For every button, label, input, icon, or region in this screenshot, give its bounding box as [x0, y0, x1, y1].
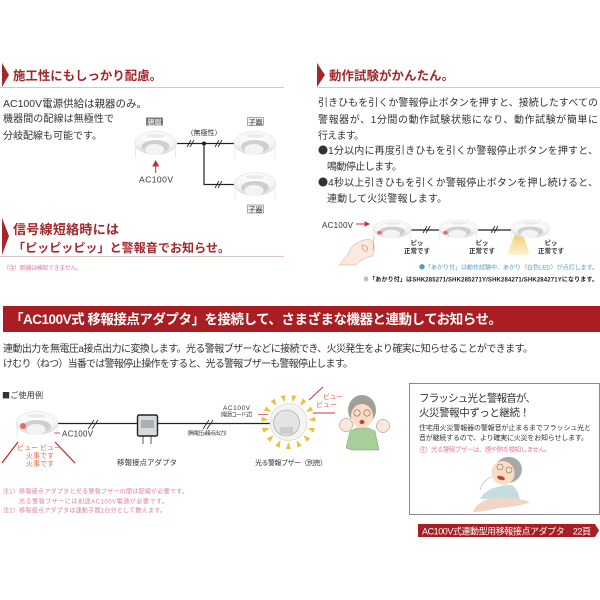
- label: non-polar: （無極性）: [186, 128, 222, 137]
- text block: test description: 引きひもを引くか警報停止ボタンを押すと、接続したすべての: [318, 96, 598, 109]
- heading marker arrow: [2, 218, 9, 255]
- label: AC100V cord: （電源コード式）: [217, 410, 256, 418]
- notes: [3, 488, 188, 514]
- panel: installation ease: [0, 63, 284, 214]
- label: child top: [248, 118, 264, 126]
- label: parent: 親器: [148, 118, 162, 126]
- heading: signal short alarm: 信号線短絡時には: [13, 222, 119, 237]
- alarm text: 火事です: [26, 459, 54, 468]
- alarm text: 火事です: [26, 451, 54, 460]
- text block: adapter description: [3, 342, 533, 370]
- label: parent: [146, 118, 163, 126]
- sound lines: [309, 387, 335, 413]
- heading marker arrow: [317, 63, 325, 87]
- text block: installation description: AC100V電源供給は親器のみ。: [3, 97, 147, 110]
- beep labels: 正常です: [469, 246, 496, 255]
- usage heading: ■ご使用例: [2, 390, 43, 401]
- label: AC100V cord: [217, 405, 256, 418]
- heading: signal short alarm: 「ピッピッピッ」と警報音でお知らせ。: [13, 240, 230, 255]
- heading underline: [0, 256, 284, 257]
- banner: adapter: 「AC100V式 移報接点アダプタ」を接続して、さまざまな機器と連動してお知らせ。: [10, 311, 502, 327]
- text block: adapter description: 連動出力を無電圧a接点出力に変換します。光る警報ブザーなどに接続でき、火災発生をより確実に知らせることができます。: [3, 342, 533, 355]
- icon: detector 3: [511, 220, 550, 241]
- notes: 注1）移報接点アダプタと光る警報ブザーの間は配線が必要です。: [3, 488, 188, 496]
- panel: signal short alarm: [0, 218, 284, 272]
- label: adapter: 移報接点アダプタ: [117, 457, 177, 467]
- label: child top: 子器: [248, 118, 262, 126]
- icon: detector 1: [373, 220, 412, 241]
- callout text: 音が継続するので、より確実に火災をお知らせします。: [419, 433, 588, 442]
- label: AC100V: AC100V: [62, 430, 94, 438]
- wires: [177, 144, 234, 184]
- beep labels: ピッ: [410, 239, 424, 247]
- light cone: [507, 232, 530, 255]
- icon: man waking in bed: [473, 453, 530, 512]
- alarm sound lines: [2, 442, 75, 463]
- label: child bottom: 子器: [248, 206, 262, 214]
- label: AC100V: AC100V: [322, 221, 354, 230]
- callout text: 注）光る警報ブザーは、煙や熱を検知しません。: [419, 444, 551, 454]
- icon: parent detector: [134, 132, 176, 158]
- note: disconnection: （注）断線は検知できません。: [3, 264, 82, 272]
- callout heading: 火災警報中ずっと継続！: [419, 406, 530, 419]
- text block: installation description: [3, 97, 147, 142]
- beep labels: ピッ: [544, 239, 558, 247]
- heading: installation ease: 施工性にもしっかり配慮。: [13, 68, 162, 83]
- footer tag: page reference: AC100V式連動型用移報接点アダプタ 22頁: [422, 526, 591, 536]
- text block: test description: 連動して火災警報します。: [327, 192, 447, 205]
- icon: flashing buzzer: [261, 395, 316, 449]
- heading underline: [317, 87, 600, 88]
- blue note: ●「あかり付」は動作試験中、あかり（白色LED）が点灯します。: [419, 262, 598, 272]
- icon: surprised man: [340, 395, 390, 450]
- text block: test description: 鳴動停止します。: [327, 160, 402, 173]
- wiring diagram: [134, 118, 276, 214]
- sound text: [316, 392, 343, 409]
- wires: [58, 422, 270, 424]
- label: AC100V: AC100V: [139, 174, 173, 184]
- notes: 光る警報ブザーには別途AC100V電源が必要です。: [19, 498, 168, 506]
- text block: test description: [318, 96, 598, 205]
- label: no-voltage output: （無電圧a接点出力）: [184, 429, 230, 437]
- text block: adapter description: けむり（ねつ）当番では警報停止操作をすると、光る警報ブザーも警報停止します。: [3, 357, 353, 370]
- icon: adapter: [138, 415, 158, 444]
- banner: adapter: [3, 306, 600, 332]
- panel: usage example: [2, 387, 390, 514]
- icon: detector 2: [439, 220, 478, 241]
- label: AC100V cord: AC100V: [223, 405, 251, 412]
- notes: 注2）移報接点アダプタは連動子器1台分として数えます。: [3, 506, 166, 514]
- icon: child detector bottom: [234, 172, 276, 199]
- text block: test description: ●1分以内に再度引きひもを引くか警報停止ボタンを押すと、: [318, 142, 598, 157]
- text block: test description: 警報器が、1分間の動作試験状態になり、動作試験が簡単に: [318, 113, 598, 126]
- sound text: ビュー: [316, 400, 337, 409]
- beep labels: [404, 239, 564, 255]
- label: buzzer: 光る警報ブザー（別売）: [255, 458, 327, 467]
- heading: signal short alarm: [13, 222, 230, 255]
- model note: ※「あかり付」はSHK285271/SHK285271Y/SHK284271/SHK284271Yになります。: [363, 276, 598, 284]
- arrow: AC feed: [356, 222, 369, 226]
- label: child bottom: [248, 205, 264, 214]
- panel: operation test: [317, 63, 600, 284]
- callout text: [419, 423, 591, 454]
- beep labels: 正常です: [538, 246, 564, 255]
- beep labels: 正常です: [404, 246, 430, 255]
- sound text: ビュー: [323, 392, 343, 401]
- icon: alarm detector: [16, 412, 58, 438]
- heading underline: [0, 87, 284, 88]
- heading: operation test: 動作試験がかんたん。: [329, 68, 454, 83]
- alarm text: ビュー ビュー: [17, 443, 61, 452]
- beep labels: ピッ: [476, 239, 488, 247]
- arrow: AC: [54, 432, 60, 434]
- wires: [411, 229, 511, 231]
- callout heading: [419, 392, 536, 419]
- text block: installation description: 機器間の配線は無極性で: [3, 112, 114, 125]
- panel: flash callout: [410, 384, 600, 514]
- callout text: 住宅用火災警報器の警報音が止まるまでフラッシュ光と: [419, 423, 591, 432]
- alarm text: [17, 443, 61, 468]
- heading marker arrow: [2, 63, 9, 87]
- callout heading: フラッシュ光と警報音が、: [419, 392, 536, 404]
- icon: child detector top: [234, 132, 276, 158]
- text block: test description: 行えます。: [318, 129, 364, 142]
- arrow: AC input: [153, 161, 158, 173]
- icon: hand pulling string: [339, 237, 374, 265]
- rays: [261, 395, 316, 449]
- text block: test description: ●4秒以上引きひもを引くか警報停止ボタンを押し続けると、: [318, 174, 598, 189]
- arrow: power: [258, 414, 268, 416]
- test diagram: [322, 220, 598, 284]
- text block: installation description: 分岐配線も可能です。: [3, 129, 102, 142]
